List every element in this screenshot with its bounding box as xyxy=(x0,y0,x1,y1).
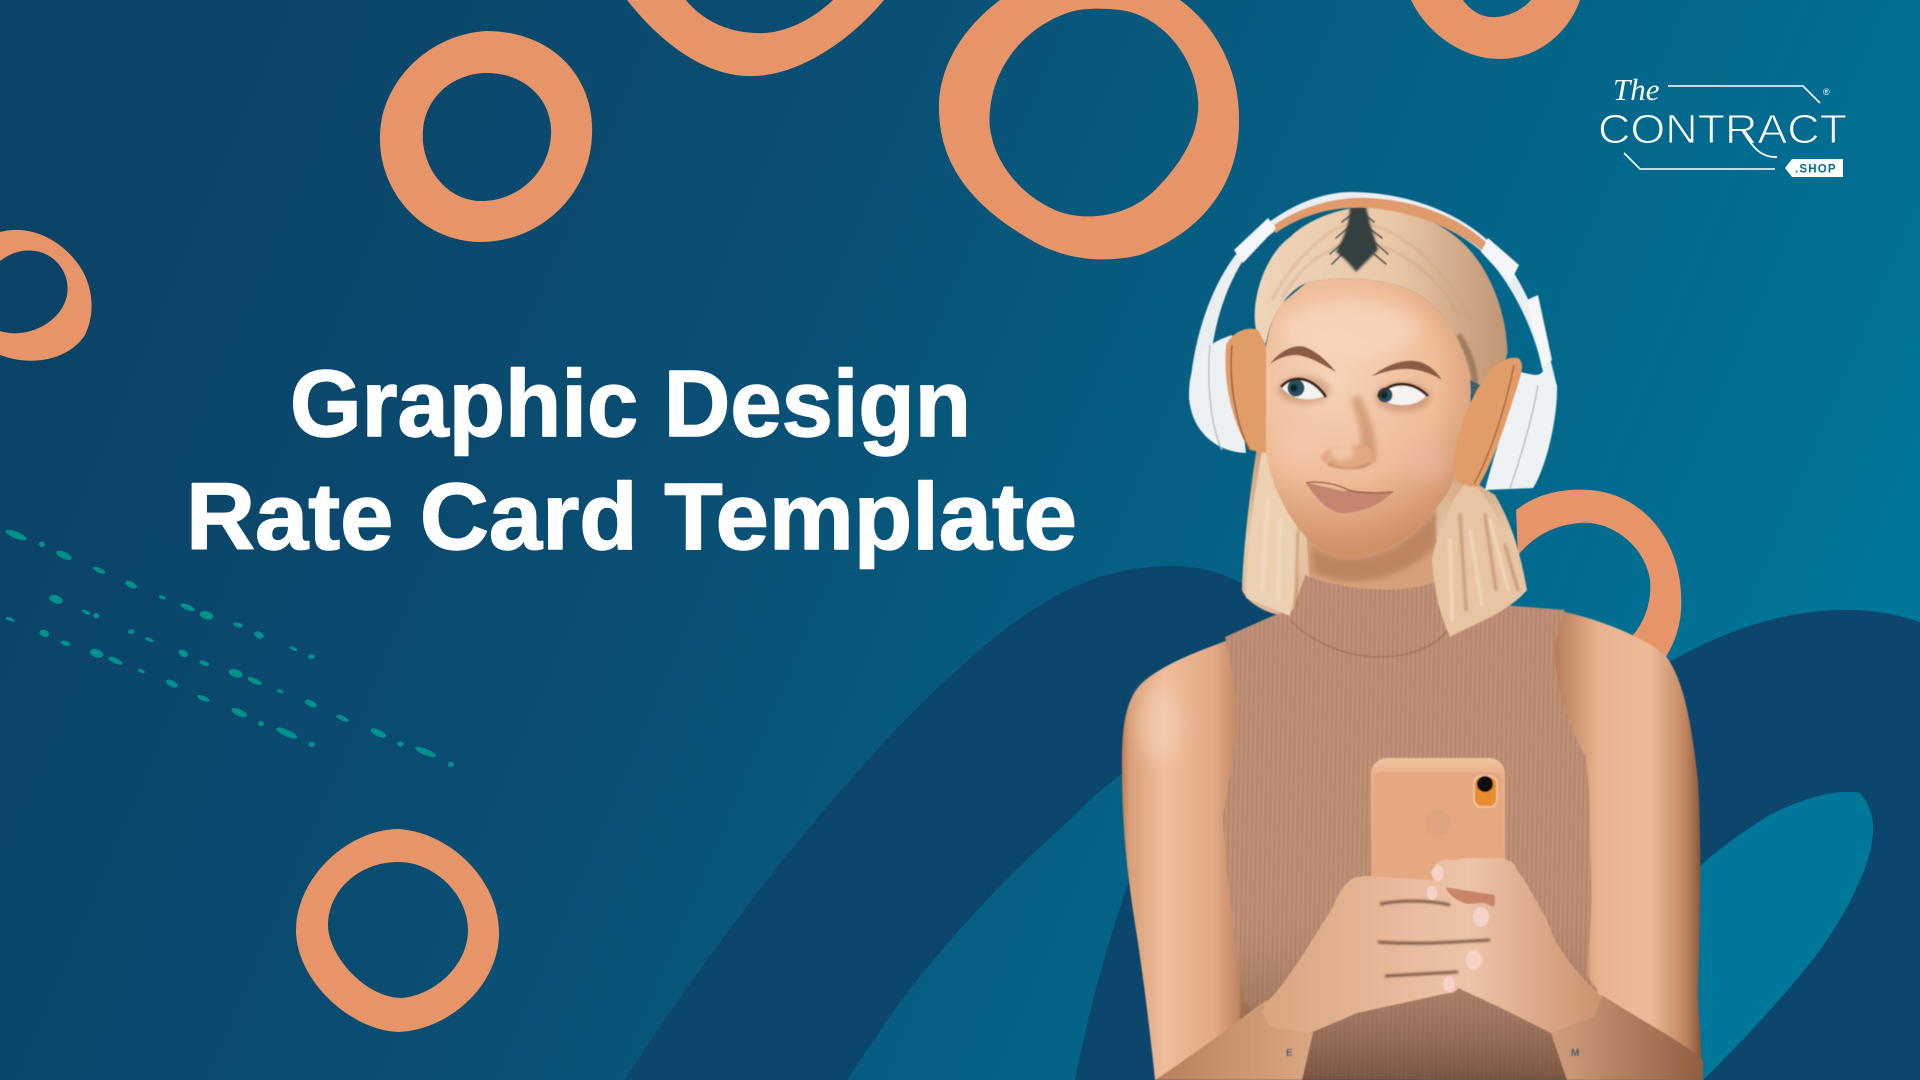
thumbs and fingers xyxy=(1360,872,1505,992)
dark hair part xyxy=(1330,204,1388,272)
left ear cup xyxy=(1189,329,1266,453)
phone logo xyxy=(1425,810,1451,836)
woman with headphones and phone xyxy=(1122,192,1703,1080)
back hair xyxy=(1242,440,1527,637)
left eye xyxy=(1281,379,1326,399)
ring: top right partial xyxy=(1411,0,1580,59)
logo: The Contract Shop: CONTRACT xyxy=(1598,106,1847,152)
logo: The Contract Shop xyxy=(1598,72,1847,177)
sleeveless top xyxy=(1223,600,1598,1080)
fingernails xyxy=(1427,865,1489,992)
ring: top left circle xyxy=(380,31,592,242)
right ear cup xyxy=(1454,358,1557,490)
ring: bottom left circle xyxy=(296,829,499,1032)
title xyxy=(186,351,1077,570)
wrist tattoos xyxy=(1286,1048,1579,1059)
title: Graphic Design xyxy=(290,351,971,457)
phone camera xyxy=(1473,775,1498,808)
logo: The Contract Shop: The xyxy=(1613,72,1660,107)
right hand xyxy=(1430,858,1602,1033)
pink finger xyxy=(1444,887,1495,906)
ring: left edge partial xyxy=(0,230,92,361)
ring: large top xyxy=(939,0,1239,259)
logo: The Contract Shop: .SHOP xyxy=(1795,164,1837,176)
left hand xyxy=(1262,877,1491,1033)
logo: The Contract Shop: ® xyxy=(1823,87,1830,97)
wrist tattoos: M xyxy=(1571,1048,1579,1059)
right forearm xyxy=(1551,995,1703,1080)
left arm xyxy=(1122,636,1313,1080)
left forearm xyxy=(1155,1000,1313,1080)
upper hair xyxy=(1255,207,1508,385)
lips xyxy=(1306,482,1393,513)
phone xyxy=(1371,758,1505,893)
wrist tattoos: E xyxy=(1286,1048,1293,1059)
hair shadow right of temple xyxy=(1458,335,1475,395)
ring: top centre partial xyxy=(627,0,884,76)
title: Rate Card Template xyxy=(186,464,1077,570)
front hair strands xyxy=(1246,450,1527,637)
right arm xyxy=(1545,610,1703,1080)
shoulder highlights xyxy=(1138,687,1182,763)
dark swoosh band: left xyxy=(625,566,1420,1080)
decorative teal dashes xyxy=(4,528,454,767)
eyebrows xyxy=(1270,346,1442,380)
ring: behind woman xyxy=(1516,490,1681,665)
right eye xyxy=(1378,384,1428,405)
turtleneck collar xyxy=(1290,575,1448,657)
leaf highlight xyxy=(1660,792,1873,1080)
neck xyxy=(1306,505,1436,592)
headband xyxy=(1189,192,1557,488)
hair strands on crown xyxy=(1272,225,1470,320)
nose xyxy=(1321,444,1373,468)
facial shading xyxy=(1278,300,1447,480)
finger gaps xyxy=(1378,901,1490,976)
dark swoosh band: right with leaf cut-out xyxy=(1640,610,1920,1080)
face xyxy=(1263,279,1471,558)
hands xyxy=(1262,858,1602,1033)
chin shadow xyxy=(1312,510,1436,581)
